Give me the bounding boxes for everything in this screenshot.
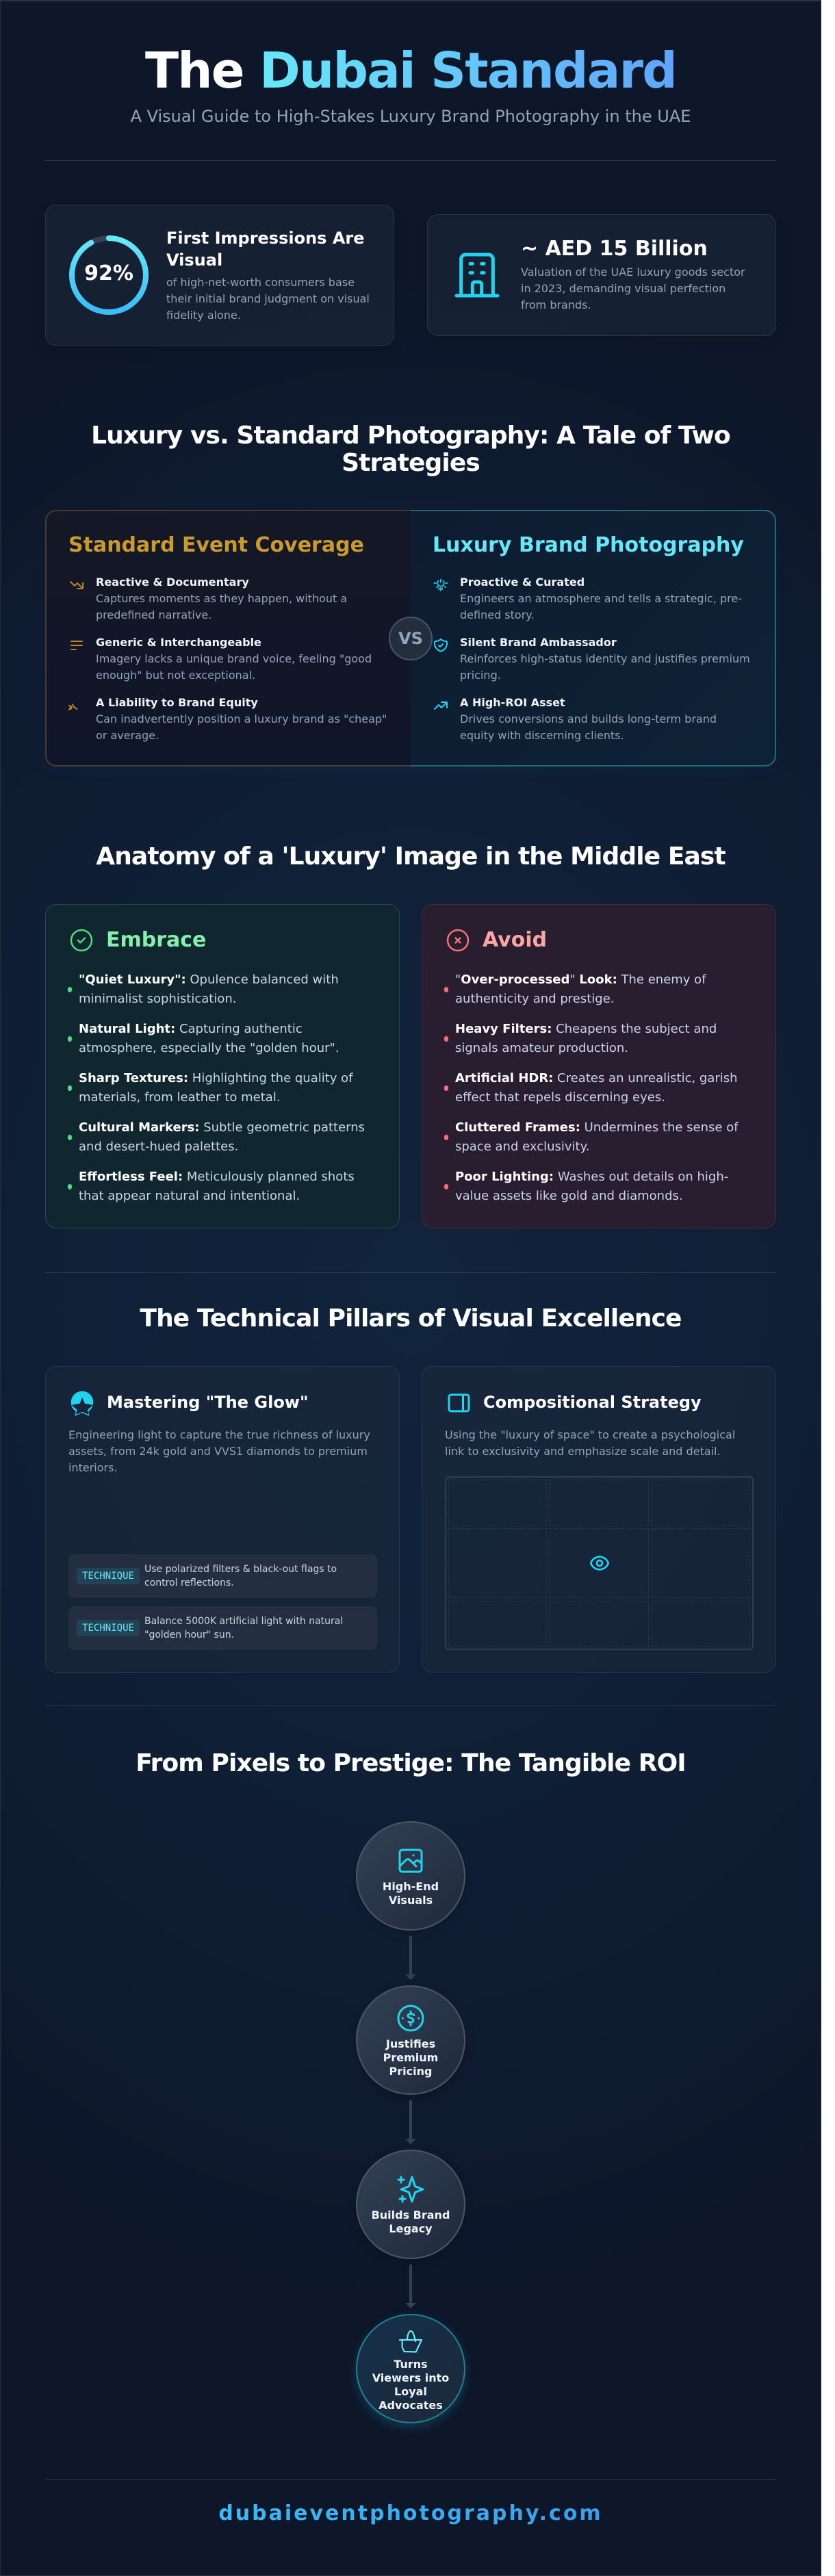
glow heading: Mastering "The Glow" bbox=[107, 1393, 308, 1412]
avoid list bbox=[444, 973, 738, 1203]
avoid list: Poor Lighting: Washes out details on high-value assets like gold and diamonds. bbox=[455, 1170, 728, 1203]
icon: sparkles bbox=[397, 2176, 424, 2202]
heading: technical pillars: The Technical Pillars of Visual Excellence bbox=[140, 1304, 682, 1332]
subtitle: A Visual Guide to High-Stakes Luxury Brand Photography in the UAE bbox=[131, 107, 691, 126]
embrace heading: Embrace bbox=[106, 928, 206, 952]
technique: balance light: Balance 5000K artificial light with natural "golden hour" sun. bbox=[144, 1616, 343, 1640]
item: generic and interchangeable: Generic & Interchangeable bbox=[96, 636, 261, 649]
heading: ROI: From Pixels to Prestige: The Tangible ROI bbox=[136, 1749, 686, 1777]
VS badge: VS bbox=[398, 629, 423, 648]
stat description: of high-net-worth consumers base their initial brand judgment on visual fidelity alone. bbox=[166, 276, 370, 322]
technique: balance light: TECHNIQUE bbox=[82, 1623, 134, 1634]
item: liability to brand equity: Can inadvertently position a luxury brand as "cheap" or average. bbox=[96, 712, 387, 742]
flow node: high-end visuals bbox=[356, 1821, 465, 1931]
embrace list bbox=[68, 973, 365, 1203]
stat heading: First Impressions Are Visual bbox=[166, 229, 364, 270]
embrace list: Effortless Feel: Meticulously planned shots that appear natural and intentional. bbox=[79, 1170, 355, 1203]
avoid list: Artificial HDR: Creates an unrealistic, garish effect that repels discerning eyes. bbox=[455, 1071, 738, 1105]
icon: dollar circle bbox=[397, 2005, 424, 2031]
item: reactive and documentary bbox=[70, 576, 347, 621]
heading: luxury vs standard: Luxury vs. Standard Photography: A Tale of Two Strategies bbox=[91, 422, 730, 477]
composition description: Using the "luxury of space" to create a psychological link to exclusivity and emphasize scale and detail. bbox=[445, 1428, 735, 1458]
panel: avoid bbox=[422, 904, 776, 1228]
rule of thirds frame bbox=[445, 1476, 754, 1650]
stat card: 92 percent bbox=[45, 205, 394, 346]
panel: standard event coverage bbox=[45, 510, 411, 767]
icon: office building bbox=[454, 253, 500, 297]
embrace list: "Quiet Luxury": Opulence balanced with minimalist sophistication. bbox=[79, 973, 339, 1006]
footer URL: dubaieventphotography.com bbox=[218, 2501, 603, 2525]
item: liability to brand equity bbox=[68, 696, 387, 742]
flow node: justifies premium pricing bbox=[356, 1985, 465, 2095]
panel: luxury brand photography bbox=[411, 510, 776, 767]
item: reactive and documentary: Reactive & Documentary bbox=[96, 576, 249, 589]
arrow bbox=[405, 2265, 416, 2308]
icon: x circle bbox=[446, 929, 470, 951]
avoid list: Heavy Filters: Cheapens the subject and signals amateur production. bbox=[455, 1022, 717, 1055]
item: liability to brand equity: A Liability to Brand Equity bbox=[96, 696, 258, 709]
icon: eye bbox=[590, 1556, 609, 1571]
item: silent brand ambassador: Silent Brand Ambassador bbox=[460, 636, 617, 649]
arrow bbox=[405, 2100, 416, 2144]
item: proactive and curated: Proactive & Curated bbox=[460, 576, 584, 589]
glow description: Engineering light to capture the true richness of luxury assets, from 24k gold and VVS1 diamonds to premium interiors. bbox=[68, 1428, 370, 1474]
embrace list: Sharp Textures: Highlighting the quality of materials, from leather to metal. bbox=[79, 1071, 353, 1105]
item: high ROI asset: A High-ROI Asset bbox=[460, 696, 565, 709]
item: generic and interchangeable: Imagery lacks a unique brand voice, feeling "good enough" but not exceptional. bbox=[96, 652, 372, 682]
composition heading: Compositional Strategy bbox=[483, 1393, 702, 1412]
standard heading: Standard Event Coverage bbox=[68, 533, 364, 557]
progress ring bbox=[69, 235, 149, 315]
icon: basket bbox=[398, 2330, 423, 2353]
stat card: AED 15 billion bbox=[427, 214, 776, 336]
luxury heading: Luxury Brand Photography bbox=[433, 533, 744, 557]
progress ring: 92% bbox=[84, 261, 133, 285]
stat heading: ~ AED 15 Billion bbox=[521, 237, 708, 261]
item: proactive and curated: Engineers an atmosphere and tells a strategic, pre-defined story. bbox=[460, 592, 742, 621]
icon: star badge bbox=[71, 1391, 93, 1416]
flow node: loyal advocates: Turns Viewers into Loyal Advocates bbox=[372, 2358, 449, 2412]
technique: polarized filters: TECHNIQUE bbox=[82, 1571, 134, 1582]
heading: anatomy: Anatomy of a 'Luxury' Image in the Middle East bbox=[96, 842, 725, 871]
panel: mastering the glow bbox=[45, 1366, 400, 1673]
flow node: builds brand legacy bbox=[356, 2150, 465, 2259]
panel: embrace bbox=[45, 904, 400, 1228]
flow node: high-end visuals: High-End Visuals bbox=[383, 1880, 439, 1907]
flow node: justifies premium pricing: Justifies Premium Pricing bbox=[383, 2037, 438, 2078]
avoid list: Cluttered Frames: Undermines the sense of space and exclusivity. bbox=[455, 1120, 738, 1154]
technique: balance light bbox=[68, 1606, 377, 1650]
item: generic and interchangeable bbox=[70, 636, 372, 682]
embrace list: Natural Light: Capturing authentic atmosphere, especially the "golden hour". bbox=[79, 1022, 339, 1055]
item: proactive and curated bbox=[434, 576, 742, 621]
icon: check circle bbox=[70, 929, 93, 951]
item: silent brand ambassador bbox=[434, 636, 750, 682]
technique: polarized filters bbox=[68, 1554, 377, 1598]
VS badge bbox=[389, 617, 433, 660]
stat description: Valuation of the UAE luxury goods sector in 2023, demanding visual perfection from brands. bbox=[521, 266, 745, 311]
comparison panel bbox=[45, 510, 776, 767]
flow node: builds brand legacy: Builds Brand Legacy bbox=[372, 2208, 450, 2235]
title: The Dubai Standard bbox=[145, 42, 676, 99]
item: high ROI asset: Drives conversions and builds long-term brand equity with discerning clients. bbox=[460, 712, 717, 742]
item: high ROI asset bbox=[434, 696, 717, 742]
embrace list: Cultural Markers: Subtle geometric patterns and desert-hued palettes. bbox=[79, 1120, 365, 1154]
avoid heading: Avoid bbox=[483, 928, 547, 952]
flow node: loyal advocates bbox=[356, 2314, 465, 2423]
avoid list: "Over-processed" Look: The enemy of authenticity and prestige. bbox=[455, 973, 706, 1006]
panel: compositional strategy bbox=[422, 1366, 776, 1673]
icon: layout panel bbox=[448, 1393, 470, 1413]
icon: photo bbox=[398, 1849, 423, 1872]
item: silent brand ambassador: Reinforces high-status identity and justifies premium pricing. bbox=[460, 652, 750, 682]
header bbox=[130, 42, 691, 126]
item: reactive and documentary: Captures moments as they happen, without a predefined narrative. bbox=[96, 592, 347, 621]
technique: polarized filters: Use polarized filters & black-out flags to control reflections. bbox=[144, 1564, 337, 1588]
arrow bbox=[405, 1936, 416, 1980]
